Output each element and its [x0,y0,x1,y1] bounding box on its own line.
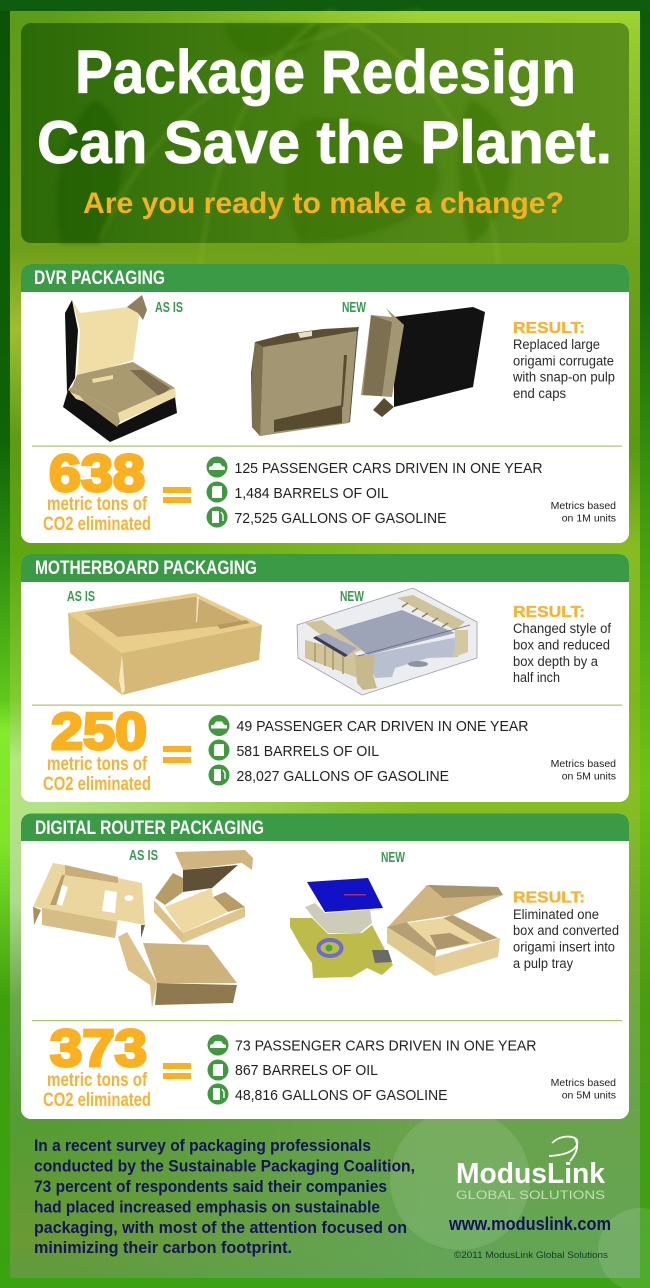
metric: 250 tons: metric tons of [47,754,148,775]
metric: 250 tons: CO2 eliminated [43,774,151,795]
equivalents list [234,460,543,527]
footer survey text: conducted by the Sustainable Packaging Coalition, [34,1158,415,1176]
metric: 638 tons: 638 [49,445,145,503]
metric: 638 tons: CO2 eliminated [43,514,151,535]
footer survey text: 73 percent of respondents said their companies [34,1178,387,1196]
result text: box and reduced [513,638,610,652]
website url: www.moduslink.com [448,1214,611,1234]
equals sign [163,487,191,503]
icon: car [208,715,230,736]
heading: motherboard packaging: MOTHERBOARD PACKAGING [35,557,257,579]
footer survey text: In a recent survey of packaging professionals [34,1137,371,1155]
result text: end caps [513,386,566,401]
icon: fuel pump [208,764,230,786]
heading: DVR packaging: DVR PACKAGING [34,267,165,289]
metrics note: Metrics based [551,758,616,770]
illustration: pulp end cap [251,327,359,436]
metrics note: on 5M units [562,770,616,782]
header panel [21,10,629,280]
icon: fuel pump [206,506,228,528]
metrics note [551,1077,616,1102]
equals sign [163,746,191,763]
equivalents list: 28,027 GALLONS OF GASOLINE [236,768,449,785]
heading: digital router packaging: DIGITAL ROUTER PACKAGING [35,817,264,839]
logo: ModusLink: GLOBAL SOLUTIONS [456,1190,605,1202]
result text: RESULT: [513,604,585,621]
result text: box and converted [513,923,619,938]
panel: motherboard packaging [21,554,629,802]
title: Can Save the Planet. [37,109,612,176]
icon: barrel [206,482,228,502]
illustration: flat origami insert [33,863,145,938]
result text: RESULT: [513,320,585,337]
label: as is: AS IS [155,299,183,316]
footer background circles [390,1110,650,1288]
result text: RESULT: [513,890,585,906]
icon: car [206,456,228,478]
result text: half inch [513,670,560,685]
label: as is: AS IS [129,847,158,864]
logo: ModusLink [456,1137,606,1202]
equivalents list [235,1038,537,1104]
equivalents list: 867 BARRELS OF OIL [235,1062,378,1079]
icon: barrel [208,1060,228,1080]
metrics note [551,500,616,524]
equivalents list: 1,484 BARRELS OF OIL [234,485,388,502]
illustration: clear box with pulp ends [297,588,477,695]
illustration: open DVR box [63,295,177,442]
illustration: open router box [154,850,253,943]
label: new: NEW [381,849,406,866]
metric: 373 tons: metric tons of [47,1070,148,1091]
result text: a pulp tray [513,956,573,971]
illustration: new router box [387,885,503,976]
icon: fuel pump [208,1084,228,1104]
label: new: NEW [340,588,365,605]
logo: ModusLink: ModusLink [456,1158,606,1190]
equivalents list: 48,816 GALLONS OF GASOLINE [235,1087,448,1104]
result text: Replaced large [513,337,600,352]
copyright: ©2011 ModusLink Global Solutions [454,1250,609,1260]
equivalents list: 72,525 GALLONS OF GASOLINE [234,510,446,527]
result text [513,604,611,685]
title [37,38,612,176]
footer survey text: had placed increased emphasis on sustainable [34,1198,380,1216]
metrics note: on 5M units [562,1090,616,1102]
illustration: router tray exploded [290,878,393,978]
equivalents list: 49 PASSENGER CAR DRIVEN IN ONE YEAR [236,718,529,735]
illustration: boxed DVR with end cap [361,307,485,417]
illustration: motherboard box [68,593,262,695]
icon: barrel [208,740,230,760]
panel: DVR packaging [21,264,629,543]
result text: origami corrugate [513,354,614,368]
result text: origami insert into [513,940,615,954]
metrics note: Metrics based [551,500,616,512]
subtitle: Are you ready to make a change? [83,187,564,220]
equivalents list: 581 BARRELS OF OIL [236,743,379,760]
title: Package Redesign [75,38,576,106]
label: as is: AS IS [67,588,95,605]
metric: 373 tons [43,1020,151,1111]
metric: 373 tons: 373 [50,1020,147,1078]
result text: box depth by a [513,654,598,669]
metric: 638 tons [43,445,151,535]
metric: 373 tons: CO2 eliminated [43,1090,151,1111]
equivalents list: 73 PASSENGER CARS DRIVEN IN ONE YEAR [235,1038,537,1054]
metric: 638 tons: metric tons of [47,494,148,515]
result text: Eliminated one [513,907,599,922]
icon: car [208,1034,228,1056]
metrics note [551,758,616,782]
equals sign [163,1063,191,1079]
result text [512,320,615,401]
metric: 250 tons: 250 [51,703,147,761]
equivalents list: 125 PASSENGER CARS DRIVEN IN ONE YEAR [234,460,543,477]
icon: swoosh [549,1137,577,1161]
illustration: closed router box [118,932,237,1008]
metrics note: Metrics based [551,1077,616,1089]
result text: Changed style of [513,621,611,636]
metrics note: on 1M units [562,512,616,524]
panel: digital router packaging [21,814,629,1119]
result text: with snap-on pulp [512,370,615,384]
metric: 250 tons [43,703,151,795]
equivalents list [236,718,529,785]
footer survey text [34,1137,415,1257]
result text [513,890,619,971]
label: new: NEW [342,299,367,316]
globe artwork [56,10,510,280]
footer survey text: packaging, with most of the attention focused on [34,1219,407,1237]
footer survey text: minimizing their carbon footprint. [34,1239,292,1257]
